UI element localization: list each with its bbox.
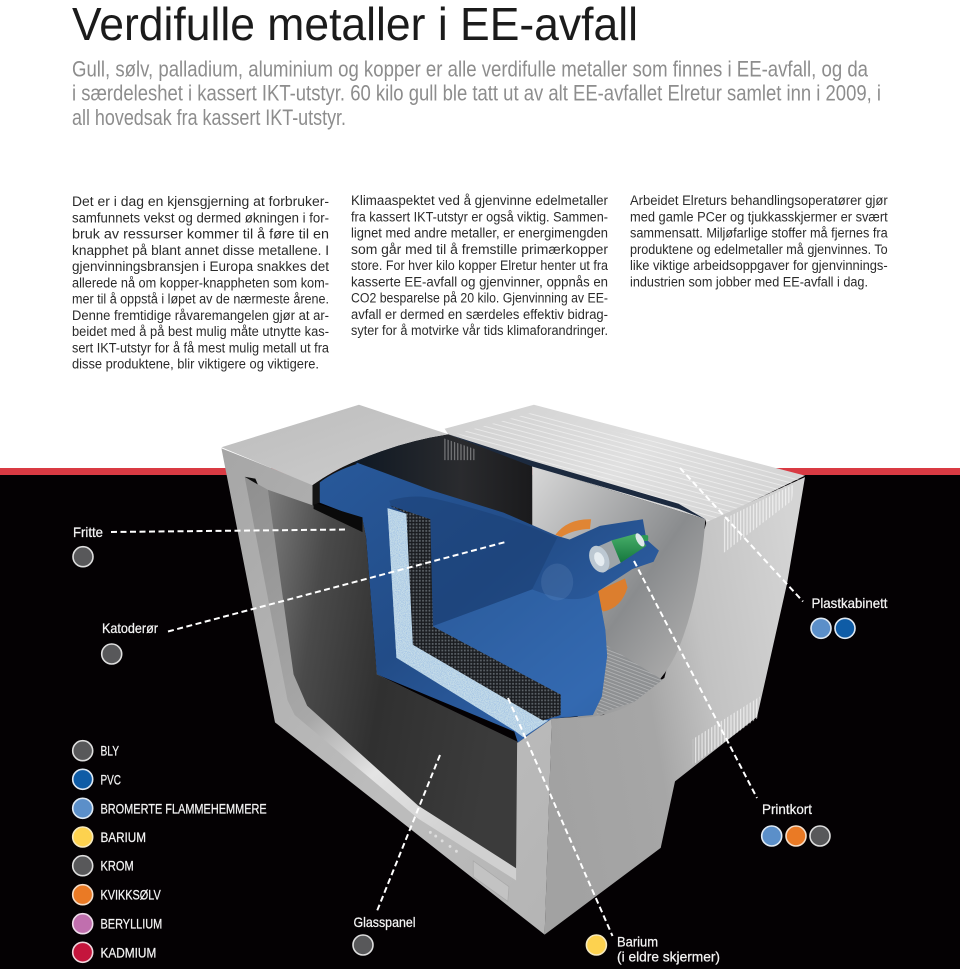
text column 1: bruk av ressurser kommer til å føre til en bbox=[72, 226, 329, 242]
dark interior wall bbox=[354, 434, 532, 552]
callout: Barium: Barium bbox=[617, 934, 658, 950]
text column 3: sammensatt. Miljøfarlige stoffer må fjernes fra bbox=[630, 226, 888, 240]
legend item: KROM bbox=[73, 856, 134, 876]
callout: Plastkabinett: Plastkabinett bbox=[812, 595, 888, 611]
callout: Printkort: Printkort bbox=[762, 801, 812, 817]
interior floor vents bbox=[596, 645, 662, 714]
legend item: BARIUM bbox=[73, 827, 146, 847]
red divider bar bbox=[0, 468, 960, 475]
text column 1: allerede nå om kopper-knappheten som kom- bbox=[72, 275, 329, 290]
callout: Barium: (i eldre skjermer) bbox=[617, 948, 720, 964]
intro text bbox=[72, 56, 881, 130]
black background panel bbox=[0, 475, 960, 969]
legend item: BLY: BLY bbox=[100, 743, 119, 759]
text column 1 bbox=[72, 194, 329, 372]
text column 1: knapphet på blant annet disse metallene. I bbox=[72, 243, 329, 258]
text column 2: store. For hver kilo kopper Elretur henter ut fra bbox=[351, 258, 608, 273]
text column 1: sert IKT-utstyr for å få mest mulig metall ut fra bbox=[72, 340, 329, 355]
interior back wall bbox=[532, 466, 705, 718]
text column 1: gjenvinningsbransjen i Europa snakkes det bbox=[72, 259, 329, 274]
illustration: cutaway CRT monitor bbox=[221, 405, 805, 935]
front bezel of the cabinet bbox=[221, 448, 552, 935]
cabinet top surface, left bbox=[221, 405, 448, 485]
screen top shadow bbox=[314, 503, 362, 532]
text column 3: Arbeidet Elreturs behandlingsoperatører gjør bbox=[630, 193, 888, 208]
text column 2: avfall er dermed en særdeles effektiv bidrag- bbox=[351, 307, 608, 322]
legend item: BLY bbox=[73, 741, 119, 761]
legend item: PVC bbox=[73, 769, 121, 789]
legend item: KVIKKSØLV: KVIKKSØLV bbox=[100, 887, 161, 903]
bezel inner bevel bbox=[245, 477, 516, 880]
text column 1: Det er i dag en kjensgjerning at forbruker- bbox=[72, 194, 329, 209]
legend item: BERYLLIUM: BERYLLIUM bbox=[100, 916, 162, 932]
front flap bbox=[473, 861, 509, 901]
text column 3: produktene og edelmetaller må gjenvinnes. To bbox=[630, 242, 888, 257]
front control buttons bbox=[429, 831, 458, 853]
text column 2: syter for å motvirke vår tids klimaforandringer. bbox=[351, 323, 608, 338]
callout: Katoderør bbox=[102, 542, 505, 664]
text column 2: CO2 besparelse på 20 kilo. Gjenvinning av EE- bbox=[351, 290, 608, 306]
callout: Glasspanel: Glasspanel bbox=[354, 914, 416, 930]
legend item: KADMIUM: KADMIUM bbox=[100, 944, 156, 960]
glass screen bbox=[268, 490, 517, 868]
text column 1: samfunnets vekst og dermed økningen i for- bbox=[72, 210, 329, 225]
legend item: BROMERTE FLAMMEHEMMERE bbox=[73, 798, 267, 818]
legend of hazardous substances bbox=[73, 741, 267, 962]
shadow mask mesh bbox=[389, 505, 561, 720]
legend item: PVC: PVC bbox=[100, 771, 121, 787]
text column 3: like viktige arbeidsoppgaver for gjenvinnings- bbox=[630, 258, 888, 273]
callout: Glasspanel bbox=[353, 755, 440, 955]
text column 3 bbox=[630, 193, 888, 289]
text column 3: industrien som jobber med EE-avfall i dag. bbox=[630, 274, 868, 289]
legend item: KADMIUM bbox=[73, 942, 156, 962]
text column 1: disse produktene, blir viktigere og viktigere. bbox=[72, 357, 319, 372]
legend item: BERYLLIUM bbox=[73, 914, 162, 934]
text column 2: Klimaaspektet ved å gjenvinne edelmetaller bbox=[351, 193, 608, 208]
text column 2 bbox=[351, 193, 609, 338]
picture tube funnel bbox=[320, 463, 659, 743]
glass cross-section with frit speckle bbox=[387, 508, 548, 737]
legend item: BARIUM: BARIUM bbox=[100, 829, 146, 845]
electron gun bbox=[585, 532, 648, 576]
intro text: all hovedsak fra kassert IKT-utstyr. bbox=[72, 105, 346, 130]
legend item: KVIKKSØLV bbox=[73, 885, 161, 905]
cabinet right side bbox=[545, 477, 805, 935]
orange deflection yoke, lower bbox=[597, 578, 627, 612]
rear cabinet top bbox=[445, 405, 805, 524]
callout: Printkort bbox=[634, 561, 830, 846]
text column 2: som går med til å fremstille primærkopper bbox=[351, 242, 609, 257]
callout: Katoderør: Katoderør bbox=[102, 620, 158, 636]
text column 2: lignet med andre metaller, er energimengden bbox=[351, 226, 608, 240]
callout: Barium bbox=[508, 698, 720, 964]
text column 3: med gamle PCer og tjukkasskjermer er svært bbox=[630, 209, 888, 224]
text column 2: kasserte EE-avfall og gjenvinner, oppnås en bbox=[351, 274, 608, 289]
callout: Fritte bbox=[73, 524, 348, 567]
text column 1: Denne fremtidige råvaremangelen gjør at ar- bbox=[72, 308, 329, 323]
legend item: BROMERTE FLAMMEHEMMERE: BROMERTE FLAMMEHEMMERE bbox=[100, 800, 267, 816]
orange deflection yoke, upper bbox=[555, 519, 591, 537]
text column 2: fra kassert IKT-utstyr er også viktig. Sammen- bbox=[351, 209, 608, 224]
text column 1: beidet med å på best mulig måte utnytte kas- bbox=[72, 324, 329, 339]
ghosted gun inside the tube bbox=[541, 564, 573, 600]
text column 1: mer til å oppstå i løpet av de nærmeste årene. bbox=[72, 292, 329, 306]
legend item: KROM: KROM bbox=[100, 858, 134, 874]
callout: Plastkabinett bbox=[680, 468, 888, 638]
callout: Fritte: Fritte bbox=[73, 524, 103, 540]
dark rim of the opening bbox=[448, 434, 705, 519]
